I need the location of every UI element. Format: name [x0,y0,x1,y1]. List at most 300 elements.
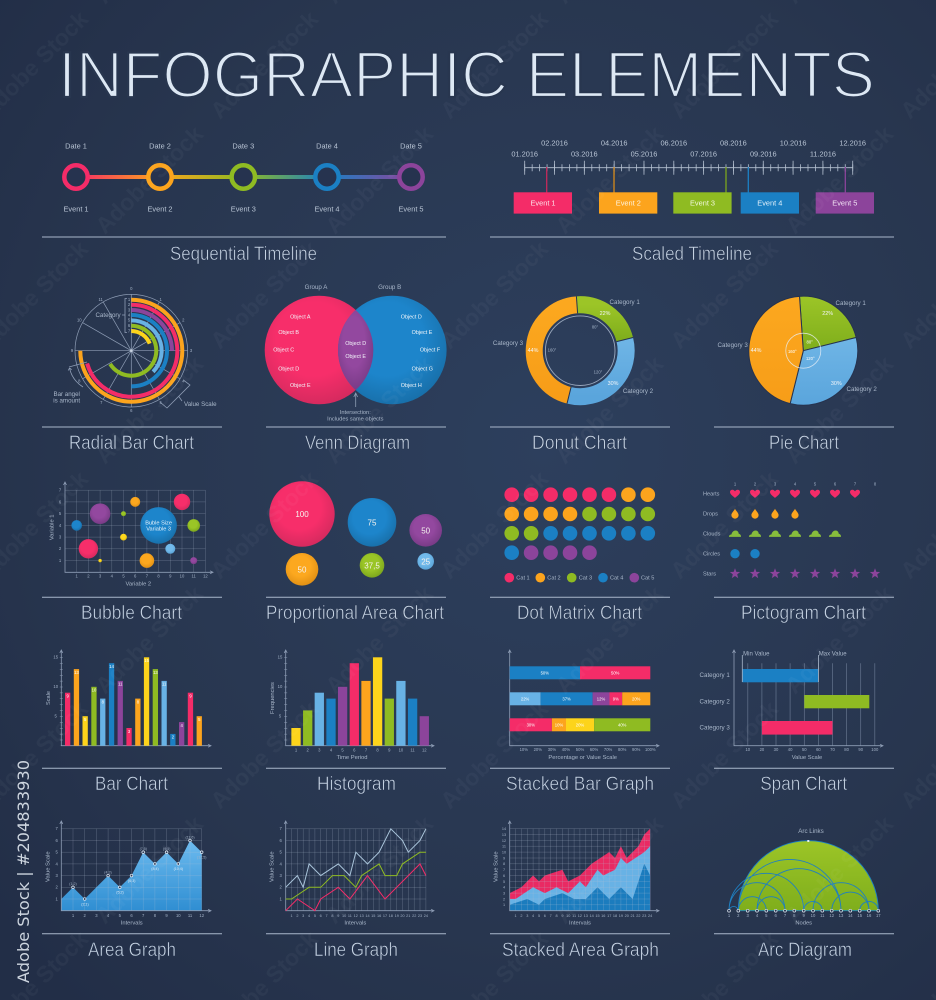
pie labels: Category 2 [847,386,877,393]
heading: proportional area chart: Proportional Area Chart [266,603,445,624]
column numbers: 5 [814,482,817,486]
radial grid [75,294,188,407]
scale labels: 50% [576,747,584,752]
panel: line graph [266,821,446,961]
object labels: Object C [273,348,294,354]
point labels: (2;1) [81,902,89,906]
scale labels: 15 [53,655,59,660]
bar values: 13 [153,670,158,675]
category index labels: 1 [128,297,131,302]
axis labels: 4 [280,861,283,866]
timeline connector [76,175,411,179]
axis labels: 7 [550,914,552,918]
heading: arc diagram: Arc Diagram [758,940,852,961]
circle values: 50 [298,565,307,574]
scale labels: 100% [645,747,656,752]
legend: Cat 1 [516,576,530,582]
scale labels: 100 [871,747,879,752]
scale labels: 30 [774,747,779,752]
event boxes: Event 4 [757,198,782,208]
axes [64,482,213,574]
month labels: 09.2016 [750,150,777,158]
dot grid [504,487,655,560]
axis labels: 11 [502,845,506,849]
heading: sequential timeline: Sequential Timeline [170,244,317,265]
bar values: 14 [109,664,115,669]
axis labels: 23 [642,914,646,918]
axis labels: 20 [625,914,629,918]
node labels: 11 [820,913,825,918]
node labels: 13 [839,913,844,918]
axis labels: 9 [337,914,339,918]
category index labels: 5 [128,318,131,323]
angular scale labels: 10 [77,318,82,322]
panel: pie chart [714,296,894,454]
segment values: 20% [632,696,641,701]
bubble size label: Buble Size [145,520,172,526]
axis labels: 1 [290,914,293,918]
scale labels: 30% [548,747,556,752]
bubble size label: Variable 3 [146,527,171,533]
scale labels: 50 [802,747,807,752]
bar values: 4 [181,723,184,728]
object labels: Object B [278,330,299,336]
panel: venn diagram [265,284,447,454]
column numbers: 6 [834,482,837,486]
point labels: (11;6) [185,835,195,839]
segment values: 50% [611,670,620,675]
heading: area graph: Area Graph [88,940,176,961]
axis labels: 11 [572,914,576,918]
category index labels: 6 [128,323,131,328]
axis labels: Intervals [569,920,591,926]
bar values: 11 [118,682,123,687]
scale labels [46,655,59,719]
data lines [286,829,426,911]
group labels: Group A [305,284,328,291]
event labels: Event 3 [231,204,256,213]
axis labels: 9 [388,748,391,752]
row labels: Clouds [703,532,721,538]
month labels: 01.2016 [511,150,538,158]
event boxes: Event 2 [616,198,641,208]
circle: group A [265,296,373,404]
node labels: 12 [829,913,835,918]
angular scale labels: 0 [130,286,133,291]
axis tick labels: 4 [59,523,62,528]
donut labels: 30% [608,381,619,387]
axis labels: 3 [318,748,321,752]
segment values: 10% [555,722,563,727]
donut labels: 120° [594,370,603,374]
axis labels: 10 [566,914,570,918]
scale labels: 5 [55,714,58,719]
scale labels: 10 [745,747,751,752]
month labels [511,138,866,158]
axis labels: 5 [280,850,283,855]
object labels: Object D [278,367,299,373]
node labels: 5 [765,913,768,918]
angular scale labels: 11 [99,297,104,302]
stacked bars [510,666,650,731]
bar values: 9 [189,694,192,698]
donut labels: Category 1 [610,299,640,306]
bar values: 2 [172,735,175,740]
axis tick labels: 5 [122,574,125,578]
scale labels: 90 [858,747,864,752]
data markers [72,839,203,900]
axes [284,821,434,912]
heading: venn diagram: Venn Diagram [305,433,410,454]
category index labels: 4 [128,312,131,317]
note: intersection: Intersection: [340,410,371,416]
axis labels: 4 [503,886,505,890]
axis labels: 15 [595,914,600,918]
axis tick labels: 5 [59,511,62,516]
axis labels: Time Period [336,755,368,761]
axis labels: 10 [176,913,181,918]
axis labels: 2 [503,897,505,901]
heading: histogram: Histogram [317,774,396,795]
category labels: Category 3 [700,724,730,732]
group labels [305,284,401,291]
arc links [729,859,878,911]
axis labels: 22 [412,914,416,918]
axis labels: Intervals [121,920,143,926]
panel: donut chart [490,296,670,454]
category index labels [128,297,131,333]
scale labels: Scale [46,691,52,705]
radial bars [80,300,182,402]
panel: proportional area chart [266,481,446,624]
point labels: (5;2) [116,890,124,894]
icons: clouds [729,530,841,537]
scale labels: 70 [830,747,835,752]
scale labels: 20% [534,747,542,752]
object labels: Object E [290,383,311,389]
label: category: Category [95,312,121,319]
axis tick labels: 2 [59,546,62,551]
axis labels: 24 [424,914,428,918]
axes [508,650,659,747]
object labels [273,315,441,389]
month labels: 07.2016 [690,150,717,158]
inner angle ring [545,316,615,386]
callout: bar angle [53,362,87,404]
column numbers: 2 [754,482,757,486]
segment values: 22% [521,696,530,701]
axis labels: 2 [84,913,87,918]
axis tick labels: 11 [192,574,197,578]
axis labels: 2 [520,914,522,918]
pie labels: 80° [807,340,813,344]
scale labels: Percentage or Value Scale [548,755,617,761]
icons: hearts [730,490,860,498]
pie labels: Category 3 [718,342,748,349]
axis labels: 14 [502,827,506,831]
panel: stacked bar graph [490,650,670,795]
axis labels: 11 [410,748,415,752]
circle values [295,510,431,574]
axis labels [494,827,652,926]
node labels: 7 [784,913,787,918]
month labels: 05.2016 [631,150,657,158]
bar values: 11 [162,682,167,687]
axis tick labels: 3 [99,574,102,578]
angular scale labels: 5 [160,400,163,405]
heading: pie chart: Pie Chart [769,433,840,454]
donut labels: 160° [548,348,557,352]
angular scale labels: 6 [130,408,133,413]
legend: Cat 5 [641,576,654,582]
bar values [67,658,201,740]
plot grid [61,829,202,911]
heading: line graph: Line Graph [314,940,398,961]
axis labels: 10 [399,748,404,752]
row labels: Circles [703,552,720,558]
axis labels: 8 [331,914,333,918]
scale labels: 90% [632,747,641,752]
area fill [61,840,202,911]
circle: group B [338,296,447,404]
axis labels: 3 [503,892,505,896]
axis labels: 1 [72,913,75,918]
date labels: Date 2 [149,142,171,150]
arc dome [738,841,878,911]
donut labels: 80° [592,324,598,330]
note: intersection: Includes same objects [327,417,384,423]
callout: arc links [798,828,824,842]
axis labels: 7 [280,826,283,831]
axis tick labels: 6 [134,574,137,578]
axis labels: 3 [95,913,98,918]
axis labels: 11 [348,914,352,918]
timeline nodes [64,165,423,189]
heading: dot matrix chart: Dot Matrix Chart [517,603,643,624]
point labels: (6;3) [128,879,135,883]
bubbles [71,494,200,568]
panel: arc diagram [714,828,894,961]
axis labels: 24 [648,914,652,918]
month labels: 08.2016 [720,138,747,148]
axis labels: 4 [532,914,534,918]
axis labels: 23 [418,914,422,918]
object labels: Object D [401,315,422,321]
event stems [547,167,845,193]
axis tick labels: 1 [59,558,62,563]
scale labels: 10 [53,684,59,689]
axis labels: 16 [601,914,605,918]
node labels: 2 [737,913,740,918]
callout: value scale [160,380,217,408]
title: INFOGRAPHIC ELEMENTS [58,38,875,111]
axis labels: 21 [406,914,410,918]
axis labels: 4 [107,913,110,918]
scale labels [520,747,656,761]
circle values: 75 [368,518,377,527]
axis labels: 1 [515,914,517,918]
axis labels: 5 [56,850,59,855]
axis tick labels: 10 [180,574,185,578]
axis labels: 5 [341,748,344,752]
min and max markers: Max Value [819,651,847,657]
scale labels: 60% [590,747,598,752]
node labels: 16 [867,913,872,918]
angle ring [786,333,821,368]
donut labels: 22% [600,311,611,317]
panel: area graph [42,821,222,961]
event boxes: Event 3 [690,198,715,208]
axis titles: Variable 2 [125,581,151,587]
column numbers: 1 [734,482,737,486]
axis labels: 17 [607,914,611,918]
heading: stacked bar graph: Stacked Bar Graph [506,774,654,795]
bar values: 15 [144,658,150,663]
donut labels: Category 2 [623,388,654,395]
axis labels: 20 [400,914,405,918]
axis labels: 12 [502,839,506,843]
donut segments [534,305,626,397]
axes [284,650,434,747]
angular scale labels: 9 [71,348,74,353]
legend: Cat 4 [610,576,623,582]
node labels: 10 [811,913,816,918]
axis labels: 14 [589,914,594,918]
heading: radial bar chart: Radial Bar Chart [69,433,195,454]
heading: span chart: Span Chart [760,774,848,795]
segment values [521,670,641,727]
axis labels: 1 [295,748,298,752]
bubble size label [145,520,172,533]
category labels: Category 2 [700,698,730,706]
axis labels: 2 [56,885,59,890]
point labels: (10;4) [174,867,183,871]
bar values: 8 [137,699,140,704]
axis tick labels: 2 [87,574,90,578]
bar values: 13 [74,670,79,675]
axis labels: Value Scale [494,851,500,882]
axis tick labels: 3 [59,534,62,540]
event boxes: Event 5 [832,198,857,208]
axis labels: 5 [279,714,282,719]
pie labels: Category 1 [836,300,866,307]
panel: span chart [700,650,894,795]
date labels: Date 3 [232,142,254,150]
pie labels: 44% [751,348,762,354]
category index labels: 7 [128,328,131,333]
pie labels: 160° [788,349,797,354]
axis labels: 3 [302,914,304,918]
axis labels: 6 [503,874,505,878]
axis labels: 1 [503,903,505,907]
note: intersection [327,410,384,423]
axes [60,821,211,912]
object labels: Object F [420,348,441,354]
axis labels: 8 [503,862,505,866]
group labels: Group B [378,284,401,291]
axis labels: 8 [376,748,379,752]
row labels [703,492,721,578]
heading: bubble chart: Bubble Chart [81,603,183,624]
node labels: 6 [775,913,778,918]
axis tick labels [59,488,208,578]
panel: histogram [266,650,446,795]
axis labels: Intervals [344,920,366,926]
point labels: (9;5) [163,847,170,851]
axes [732,650,883,747]
segment values: 20% [576,722,584,727]
callout: bar angle: is amount [53,397,80,404]
event boxes: Event 1 [530,198,556,208]
bar values: 5 [198,717,201,722]
column numbers: 8 [874,482,877,486]
bar values: 5 [84,717,87,722]
heading: bar chart: Bar Chart [95,774,169,795]
axis labels: 13 [359,914,364,918]
scale labels: 80% [618,747,627,752]
heading: pictogram chart: Pictogram Chart [741,603,867,624]
object labels: Object E [412,330,433,336]
category labels: Category 1 [700,672,730,679]
event labels: Event 5 [398,204,424,213]
axis labels: 2 [296,914,298,918]
axis labels: 7 [326,914,328,918]
angular scale labels [71,286,193,413]
node labels: 15 [857,913,863,918]
axis labels: 12 [354,914,358,918]
area: light blue layer [510,846,650,911]
month labels: 04.2016 [601,138,628,148]
intersection lens [338,310,373,390]
angular scale labels: 1 [160,297,163,302]
panel: bubble chart [42,482,222,624]
axis labels: 13 [502,833,506,837]
bars [65,657,202,746]
axis labels: 4 [56,861,59,866]
point labels: (7;5) [140,847,147,851]
axis labels: 10 [278,684,283,689]
circle values: 37,5 [364,561,380,570]
angular scale labels: 3 [190,348,193,353]
axis labels: 9 [165,913,168,918]
date labels: Date 4 [316,142,338,150]
axis labels: 12 [422,748,427,752]
segment values: 30% [527,722,535,727]
axis labels: 5 [538,914,540,918]
axis labels: 7 [365,748,368,752]
axis labels: 6 [320,914,322,918]
point labels: (4;3) [104,870,112,874]
scale labels [745,747,879,761]
span bars [742,669,869,735]
nodes [728,909,880,912]
axis labels: Value Scale [269,851,275,882]
pie labels: 120° [806,356,815,361]
event labels [63,204,424,213]
axis labels: 13 [584,914,588,918]
axis labels: 3 [526,914,528,918]
icons: circles [730,549,760,558]
panel: bar chart [42,650,222,795]
row labels: Drops [703,512,718,518]
donut labels: 44% [528,348,539,354]
axis labels: 14 [365,914,370,918]
donut labels [493,299,654,395]
node labels: 17 [876,913,881,918]
point labels: (1;2) [69,882,77,886]
object labels: Object A [290,315,311,321]
node labels: 14 [848,913,853,918]
